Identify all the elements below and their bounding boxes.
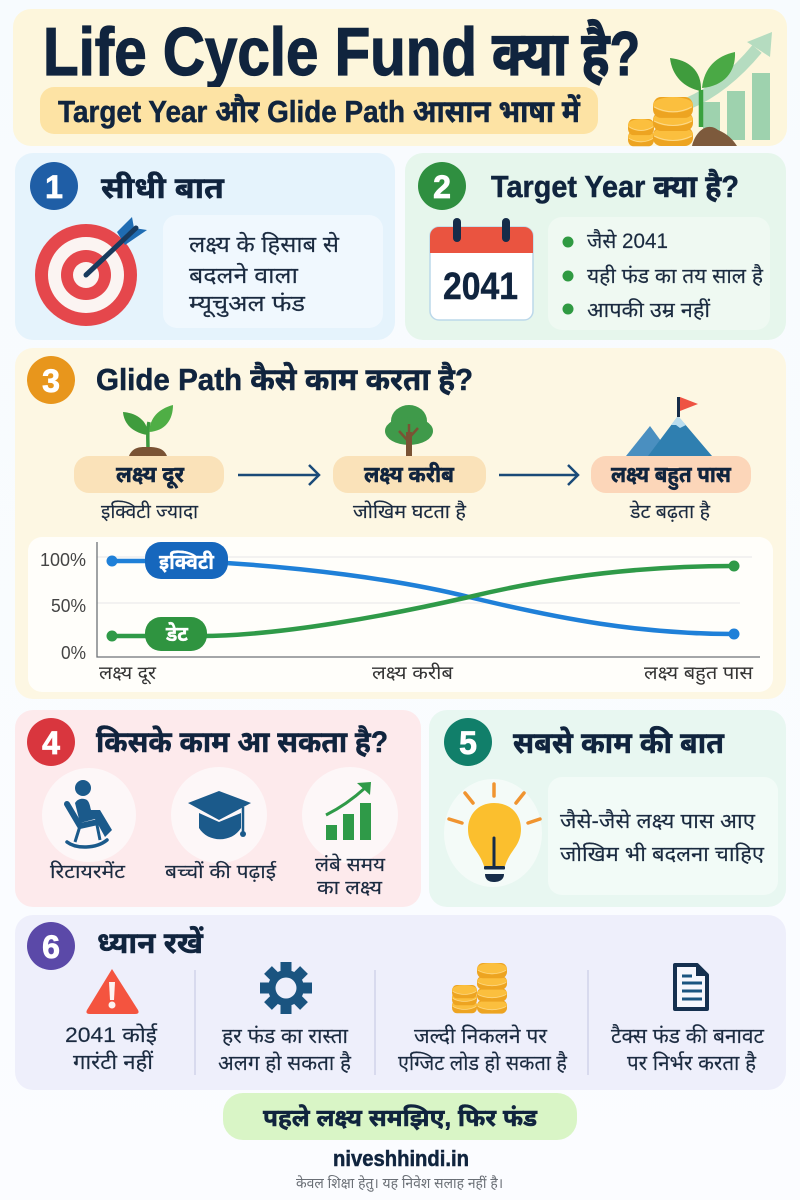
label: debt: डेट	[165, 622, 189, 646]
step: लक्ष्य दूर: इक्विटी ज्यादा	[101, 501, 199, 523]
icon: calendar 2041: 2041	[443, 266, 518, 308]
card: target year bullets	[548, 217, 770, 330]
icon: growth plant and coins	[628, 32, 772, 146]
item: different path: अलग हो सकता है	[218, 1050, 352, 1075]
number badge 4: 4	[42, 725, 60, 761]
item: no guarantee: 2041 कोई	[65, 1023, 158, 1047]
item: different path: हर फंड का रास्ता	[222, 1025, 349, 1048]
number badge 2	[418, 162, 466, 210]
axis labels: 100%	[40, 550, 86, 570]
axis labels	[40, 550, 754, 685]
item: no guarantee: गारंटी नहीं	[73, 1050, 154, 1074]
item: tax: टैक्स फंड की बनावट	[611, 1023, 764, 1048]
heading 5: सबसे काम की बात	[513, 725, 725, 760]
icon: sprout	[123, 405, 173, 456]
number badge 6: 6	[42, 929, 60, 965]
website: niveshhindi.in	[333, 1146, 469, 1171]
item: no guarantee	[65, 969, 158, 1074]
header panel	[13, 9, 787, 146]
panel: 1 सीधी बात	[15, 153, 395, 340]
step: लक्ष्य करीब: जोखिम घटता है	[353, 500, 467, 523]
item: exit load: जल्दी निकलने पर	[414, 1024, 547, 1048]
subtitle pill	[40, 87, 598, 134]
number badge 1	[30, 162, 78, 210]
number badge 6	[27, 922, 75, 970]
item: exit load: एग्जिट लोड हो सकता है	[398, 1050, 568, 1075]
axis labels: 0%	[61, 643, 86, 663]
axis labels: 50%	[51, 596, 86, 616]
title: क्या है?	[492, 18, 640, 89]
item: long term goal	[302, 767, 398, 899]
arrow	[238, 465, 319, 485]
item: education: बच्चों की पढ़ाई	[165, 860, 277, 883]
item: tax: पर निर्भर करता है	[627, 1050, 757, 1075]
number badge 1: 1	[45, 169, 63, 205]
step: लक्ष्य बहुत पास: डेट बढ़ता है	[629, 500, 711, 523]
line: debt	[111, 566, 734, 636]
subtitle pill: Target Year और Glide Path आसान भाषा में	[58, 94, 581, 129]
panel: 4 किसके काम	[15, 710, 421, 907]
item: exit load	[398, 963, 568, 1075]
icon: calendar 2041	[430, 218, 533, 320]
panel: 3 Glide Path	[15, 348, 786, 699]
number badge 2: 2	[433, 169, 451, 205]
step: लक्ष्य करीब: लक्ष्य करीब	[364, 462, 454, 487]
disclaimer: केवल शिक्षा हेतु। यह निवेश सलाह नहीं है।	[296, 1174, 503, 1193]
icon: target with dart	[35, 217, 147, 326]
panel: 2 Target Year	[405, 153, 786, 340]
axis labels: लक्ष्य दूर	[99, 663, 157, 685]
card: key message: जैसे-जैसे लक्ष्य पास आए	[560, 808, 755, 833]
card: definition: बदलने वाला	[189, 262, 298, 288]
panel: 5 सबसे काम की बात	[429, 710, 786, 907]
card: definition: लक्ष्य के हिसाब से	[189, 231, 340, 257]
line: equity	[111, 561, 734, 634]
footer callout	[223, 1093, 577, 1140]
icon: light bulb	[444, 779, 542, 887]
number badge 3: 3	[42, 363, 60, 399]
item: education	[165, 767, 277, 883]
number badge 4	[27, 718, 75, 766]
label: debt	[145, 617, 207, 651]
label: equity	[145, 542, 228, 579]
item: different path	[218, 962, 352, 1075]
item: long term goal: लंबे समय	[315, 853, 386, 876]
card: key message	[548, 777, 778, 895]
card: target year bullets: जैसे 2041	[587, 228, 668, 253]
axis labels: लक्ष्य करीब	[372, 663, 454, 683]
heading 3: Glide Path कैसे काम करता है?	[96, 362, 473, 397]
number badge 3	[27, 356, 75, 404]
step: लक्ष्य बहुत पास: लक्ष्य बहुत पास	[611, 462, 732, 490]
axis labels: लक्ष्य बहुत पास	[644, 663, 754, 685]
heading 4: किसके काम आ सकता है?	[96, 724, 388, 759]
number badge 5	[444, 718, 492, 766]
footer callout: पहले लक्ष्य समझिए, फिर फंड	[263, 1104, 537, 1132]
label: equity: इक्विटी	[159, 550, 215, 574]
heading 2: Target Year क्या है?	[491, 169, 739, 204]
step: लक्ष्य करीब	[333, 456, 486, 523]
arrow	[499, 465, 578, 485]
step: लक्ष्य दूर	[74, 456, 224, 523]
step: लक्ष्य दूर: लक्ष्य दूर	[116, 462, 185, 489]
item: long term goal: का लक्ष्य	[317, 878, 383, 899]
card: target year bullets: आपकी उम्र नहीं	[587, 298, 711, 322]
panel: 6 ध्यान रखें	[15, 915, 786, 1090]
title: Life Cycle Fund	[43, 14, 477, 90]
number badge 5: 5	[459, 725, 477, 761]
chart: glide path	[28, 537, 773, 692]
icon: tree	[385, 405, 433, 456]
item: retirement: रिटायरमेंट	[50, 860, 125, 883]
card: definition: म्यूचुअल फंड	[189, 291, 305, 318]
item: retirement	[42, 768, 136, 883]
icon: mountain with flag	[626, 397, 712, 456]
heading 6: ध्यान रखें	[97, 926, 204, 960]
item: tax	[611, 965, 764, 1075]
step: लक्ष्य बहुत पास	[591, 456, 751, 523]
card: definition	[163, 215, 383, 328]
card: key message: जोखिम भी बदलना चाहिए	[560, 842, 764, 866]
card: target year bullets: यही फंड का तय साल है	[587, 263, 764, 288]
heading 1: सीधी बात	[101, 171, 225, 205]
